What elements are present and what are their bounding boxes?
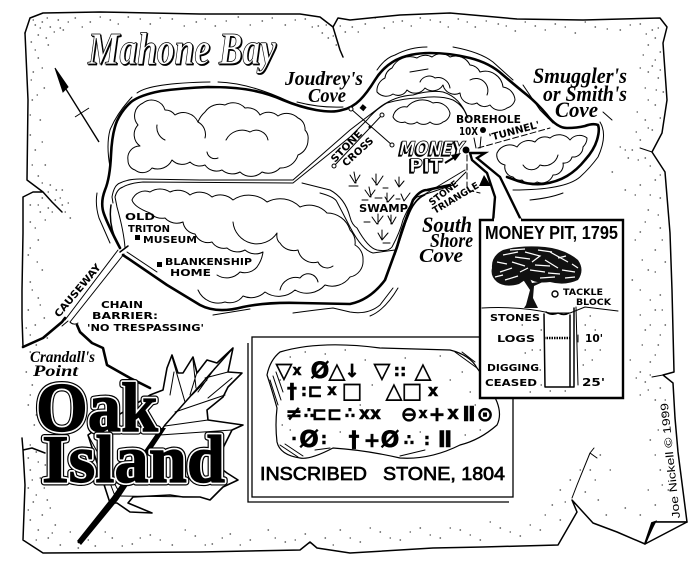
roads and causeway xyxy=(62,91,468,326)
island coastline xyxy=(23,47,612,388)
inscribed symbols: x xyxy=(327,381,337,399)
inscribed symbols: x xyxy=(292,363,302,379)
title: Oak Island xyxy=(36,370,225,497)
labels: Blankenship Home: HOME xyxy=(170,268,211,279)
inscribed symbols: + xyxy=(429,402,445,426)
inscribed symbols: ↓ xyxy=(344,361,360,382)
inscribed symbols: ⊙ xyxy=(477,402,493,426)
stone stipple xyxy=(280,350,488,435)
label: Smuggler's or Smith's Cove: Smuggler's xyxy=(533,63,627,88)
borehole and tunnel: 'TUNNEL' xyxy=(488,120,541,144)
inscribed symbols: + xyxy=(364,428,380,452)
inscribed symbols: △ xyxy=(415,359,432,384)
label: Money Pit: PIT xyxy=(408,156,442,178)
label: Joudrey's Cove: Joudrey's xyxy=(284,68,363,90)
Crandall's Point shore xyxy=(23,318,150,388)
stone triangle: TRIANGLE xyxy=(431,180,481,217)
inscribed symbols: Ø xyxy=(299,427,319,453)
tree xyxy=(492,246,582,308)
swamp: SWAMP xyxy=(359,202,408,215)
inscribed symbols: · xyxy=(291,429,297,448)
labels: Old Triton Museum: TRITON xyxy=(128,224,170,235)
title: Oak Island: Island xyxy=(42,421,225,497)
inscribed symbols: x xyxy=(428,381,439,400)
shoal lines xyxy=(96,47,612,316)
title: Mahone Bay: Mahone Bay xyxy=(87,23,276,74)
oak leaf xyxy=(77,348,243,545)
inscribed symbols: † xyxy=(348,428,360,453)
inscribed symbols xyxy=(276,359,493,453)
label: Smuggler's or Smith's Cove: Cove xyxy=(555,97,598,122)
label: causeway: CAUSEWAY xyxy=(53,262,104,320)
inscribed symbols: Ø xyxy=(311,359,330,384)
label: chain barrier: BARRIER: xyxy=(92,311,158,322)
inscribed symbols: : xyxy=(321,429,327,448)
title: Mahone Bay: Mahone Bay xyxy=(88,24,277,75)
callout arrow and Money Pit panel: LOGS xyxy=(497,334,535,345)
caption: STONE, 1804 xyxy=(383,464,505,484)
label: Money Pit xyxy=(396,137,470,178)
label: Joudrey's Cove: Cove xyxy=(308,85,346,107)
caption: INSCRIBED xyxy=(260,464,367,484)
labels: Blankenship Home: BLANKENSHIP xyxy=(165,257,252,268)
label: Smuggler's or Smith's Cove xyxy=(533,63,627,122)
inscribed symbols: ∴ xyxy=(404,431,414,449)
artist credit: Joe Nickell © 1999 xyxy=(659,402,683,519)
inscribed symbols: ▽ xyxy=(276,359,293,384)
inscribed symbols: Ⅱ xyxy=(438,428,452,453)
labels: Old Triton Museum xyxy=(125,212,197,246)
inscribed symbols: x xyxy=(447,403,459,424)
caption xyxy=(260,464,505,484)
label: Money Pit: MONEY xyxy=(397,137,468,160)
title: Oak Island: Oak xyxy=(36,370,158,447)
inscribed symbols: xx xyxy=(359,404,381,424)
inscribed symbols: □ xyxy=(402,379,422,404)
inscribed symbols: : xyxy=(424,430,430,449)
title: Oak Island: Oak xyxy=(36,370,158,447)
inscribed symbols: ⊖ xyxy=(401,402,417,426)
ground and shaft xyxy=(482,307,618,313)
labels: Old Triton Museum: OLD xyxy=(125,212,155,223)
borehole and tunnel: 10X xyxy=(459,126,478,138)
inscribed symbols: ⊏⊏ xyxy=(312,404,342,425)
label: South Shore Cove: Cove xyxy=(419,245,463,267)
panel: inscribed stone xyxy=(248,337,513,502)
borehole and tunnel: BOREHOLE xyxy=(456,114,521,126)
label: Crandall's Point: Point xyxy=(32,363,79,380)
label: South Shore Cove: Shore xyxy=(430,230,473,252)
inscribed symbols: :: xyxy=(394,361,406,380)
inscribed symbols: : xyxy=(301,381,307,400)
labels: Blankenship Home xyxy=(157,257,252,279)
label: Crandall's Point xyxy=(30,349,95,380)
stone outline xyxy=(267,345,500,458)
stone cross xyxy=(329,104,394,169)
label: South Shore Cove: South xyxy=(422,212,472,237)
title: Oak Island: Island xyxy=(42,421,225,497)
callout arrow and Money Pit panel: BLOCK xyxy=(576,298,612,308)
label: Money Pit: MONEY xyxy=(396,138,467,161)
label: chain barrier xyxy=(87,300,204,334)
inscribed symbols: ≠ xyxy=(286,401,302,425)
inscribed symbols: † xyxy=(287,379,297,403)
south shore xyxy=(123,185,450,310)
inscribed symbols: △ xyxy=(329,359,346,384)
stone cross: CROSS xyxy=(341,136,376,169)
borehole and tunnel xyxy=(456,114,550,193)
stone triangle: STONE xyxy=(427,179,461,208)
inscribed symbols: ⊏ xyxy=(307,381,323,402)
title: Oak Island: Island xyxy=(42,421,225,497)
page curl xyxy=(645,522,687,544)
inscribed symbols: Ⅱ xyxy=(462,402,476,426)
label: Joudrey's Cove xyxy=(284,68,363,107)
labels: Old Triton Museum: MUSEUM xyxy=(143,235,197,246)
label: chain barrier: 'NO TRESPASSING' xyxy=(87,323,204,334)
label: Money Pit: PIT xyxy=(409,155,443,177)
label: Smuggler's or Smith's Cove: or Smith's xyxy=(543,81,627,106)
inscribed symbols: △ xyxy=(386,379,403,404)
north arrow xyxy=(55,68,99,142)
tackle block xyxy=(552,291,558,297)
callout arrow and Money Pit panel: 25' xyxy=(582,376,605,389)
shaft stipple xyxy=(522,316,600,392)
inscribed symbols: x xyxy=(418,406,428,422)
label: chain barrier: CHAIN xyxy=(101,300,143,311)
inscribed symbols: Ø xyxy=(381,428,400,453)
label: Crandall's Point: Crandall's xyxy=(30,349,95,366)
label: South Shore Cove xyxy=(419,212,473,267)
inscribed symbols: ∴ xyxy=(345,404,355,422)
inscribed symbols: ▽ xyxy=(374,359,391,384)
inscribed symbols: ∴ xyxy=(304,404,314,422)
stone cross: STONE xyxy=(329,129,365,165)
callout arrow and Money Pit panel: TACKLE xyxy=(563,288,603,298)
callout arrow and Money Pit panel: CEASED xyxy=(485,378,537,389)
woods clouds xyxy=(128,54,587,303)
panel title: MONEY PIT, 1795 xyxy=(485,223,618,243)
title: Oak Island: Oak xyxy=(36,370,158,447)
depth labels: STONES xyxy=(490,313,540,324)
callout arrow and Money Pit panel xyxy=(470,153,623,398)
callout arrow and Money Pit panel: DIGGING xyxy=(487,363,539,374)
callout arrow and Money Pit panel: 10' xyxy=(585,332,603,345)
swamp xyxy=(349,172,410,243)
inscribed symbols: □ xyxy=(342,379,362,404)
north shore xyxy=(102,53,599,248)
